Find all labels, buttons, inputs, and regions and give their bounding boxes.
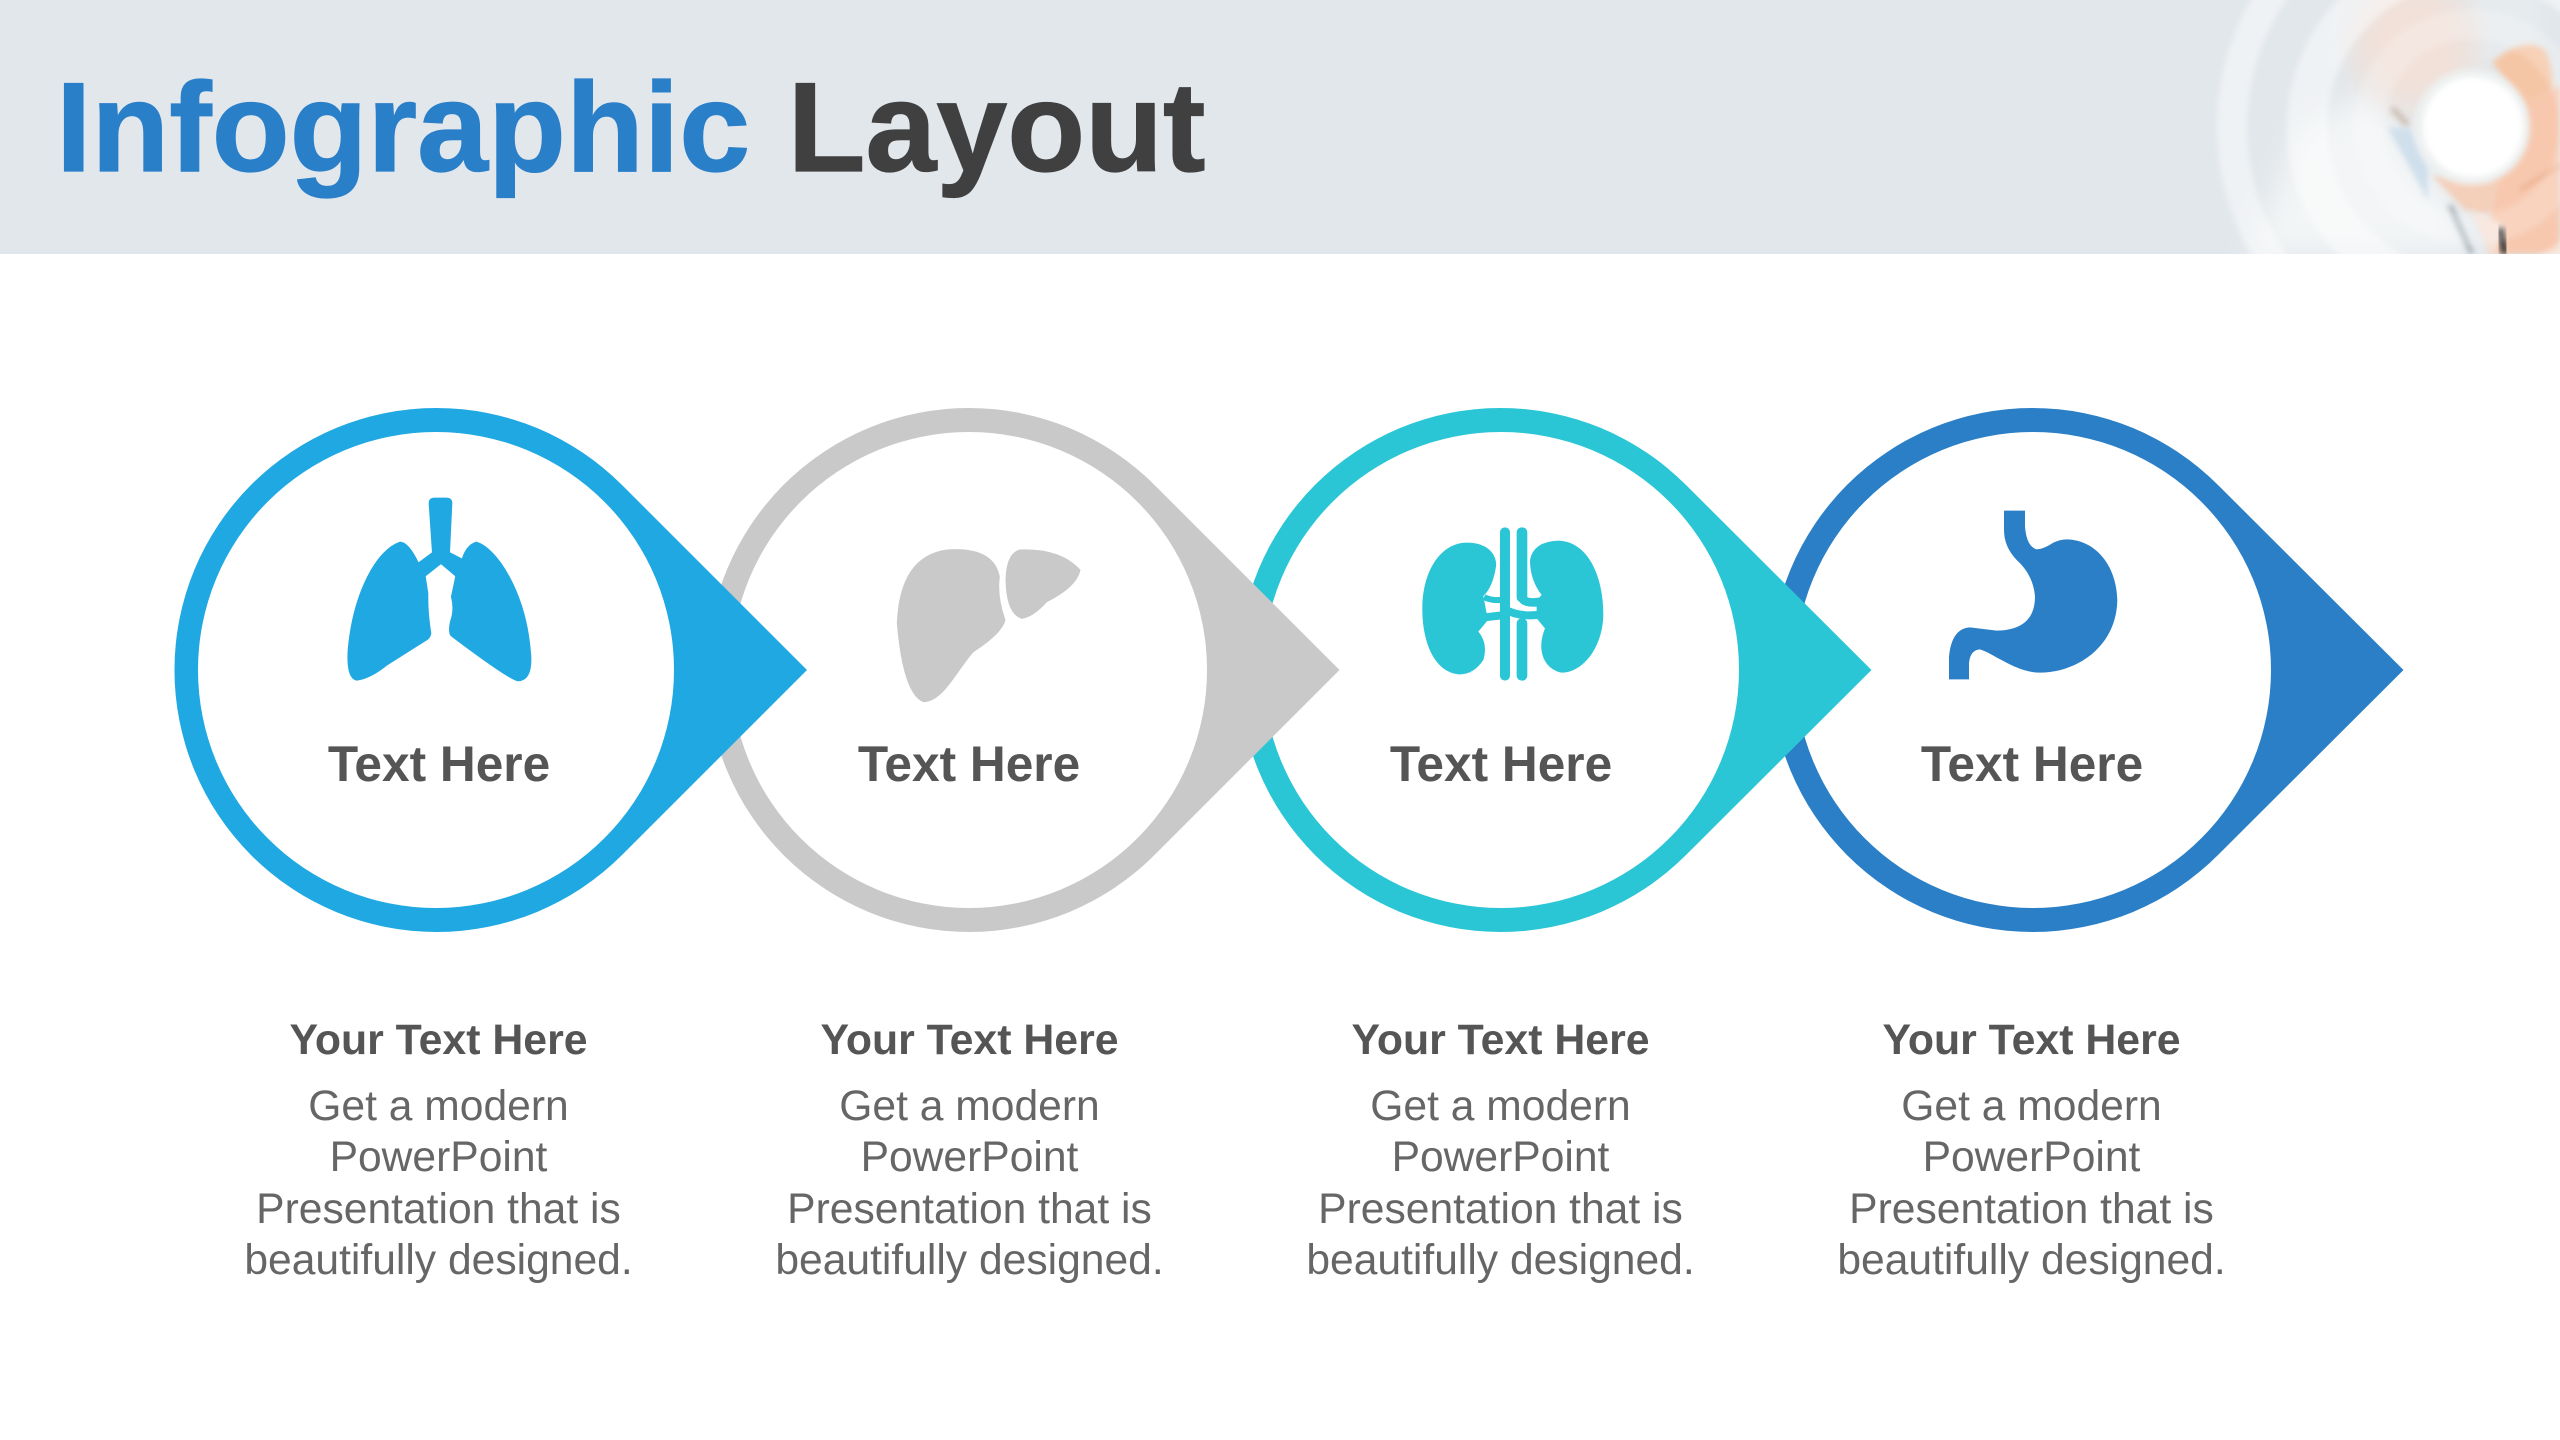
text block: step 4 (1837, 1016, 2226, 1284)
title: Infographic Layout (56, 57, 1206, 199)
label: step 2: Text Here (858, 736, 1080, 792)
text block: step 3 (1306, 1016, 1695, 1284)
icon: liver (897, 550, 1080, 702)
text block: step 1: Your Text Here (289, 1016, 588, 1064)
text block: step 2 (775, 1016, 1164, 1284)
step 4: stomach marker (1770, 408, 2404, 932)
text block: step 4: Get a modern (1901, 1082, 2162, 1130)
text block: step 3: Presentation that is (1318, 1185, 1683, 1233)
label: step 4: Text Here (1921, 736, 2143, 792)
text block: step 4: beautifully designed. (1837, 1236, 2226, 1284)
text block: step 1: Presentation that is (256, 1185, 621, 1233)
text block: step 3: Your Text Here (1351, 1016, 1650, 1064)
text block: step 3: Get a modern (1370, 1082, 1631, 1130)
text block: step 3: beautifully designed. (1306, 1236, 1695, 1284)
icon: kidneys (1422, 527, 1603, 681)
label: step 3: Text Here (1390, 736, 1612, 792)
icon: lungs (348, 498, 531, 681)
header band (0, 0, 2560, 254)
text block: step 1: Get a modern (308, 1082, 569, 1130)
step 1: lungs marker (174, 408, 807, 932)
text block: step 2: Presentation that is (787, 1185, 1152, 1233)
icon: stomach (1949, 511, 2117, 679)
text block: step 2: Your Text Here (820, 1016, 1119, 1064)
text block: step 1: beautifully designed. (244, 1236, 633, 1284)
header photo: doctor holding stethoscope (2218, 0, 2560, 254)
text block: step 1 (244, 1016, 633, 1284)
text block: step 2: Get a modern (839, 1082, 1100, 1130)
text block: step 1: PowerPoint (330, 1133, 548, 1181)
label: step 1: Text Here (328, 736, 550, 792)
text block: step 2: beautifully designed. (775, 1236, 1164, 1284)
text block: step 2: PowerPoint (861, 1133, 1079, 1181)
step 3: kidneys marker (1238, 408, 1872, 932)
text block: step 4: PowerPoint (1923, 1133, 2141, 1181)
text block: step 3: PowerPoint (1392, 1133, 1610, 1181)
text block: step 4: Presentation that is (1849, 1185, 2214, 1233)
text block: step 4: Your Text Here (1882, 1016, 2181, 1064)
step 2: liver marker (707, 408, 1340, 932)
